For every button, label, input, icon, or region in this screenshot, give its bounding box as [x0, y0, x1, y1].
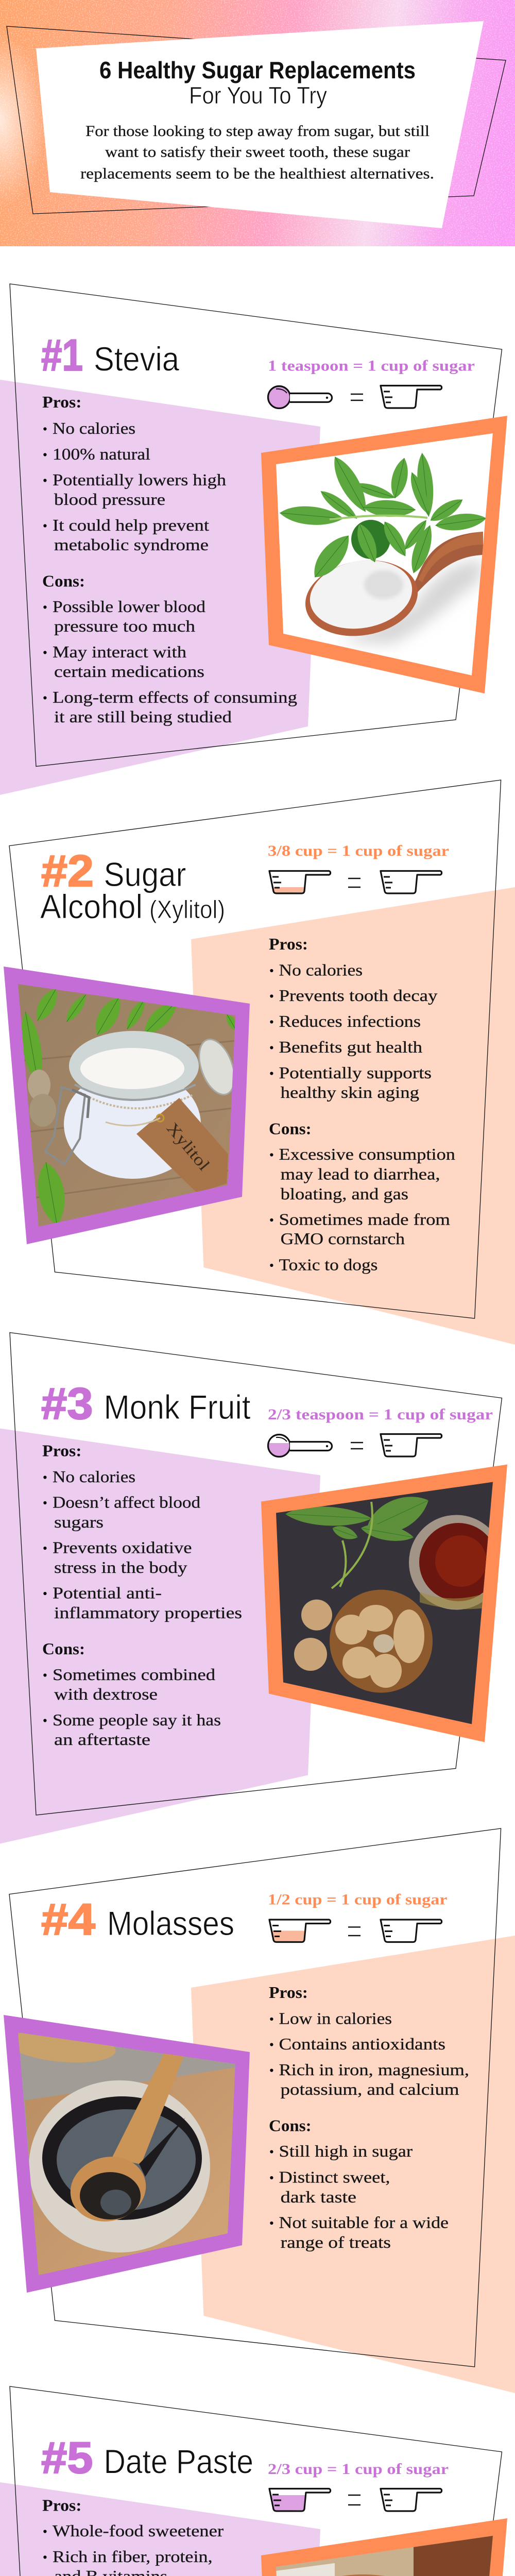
header outline frame — [7, 26, 506, 214]
cons list: Cons: — [269, 1119, 312, 1138]
pros list — [42, 1442, 242, 1622]
cons list: may lead to diarrhea, — [281, 1164, 440, 1183]
section outline — [10, 284, 502, 767]
section 1: Stevia — [0, 284, 507, 795]
cons list: Cons: — [42, 572, 85, 590]
title: For You To Try — [189, 82, 327, 109]
cons list: Long-term effects of consuming — [53, 688, 297, 706]
cons list: Some people say it has — [53, 1710, 221, 1729]
heading — [41, 331, 179, 380]
pros list — [42, 2496, 233, 2576]
cons list: Sometimes made from — [279, 1210, 450, 1228]
icon: partly filled cup — [269, 871, 331, 893]
cons list: May interact with — [53, 642, 186, 661]
serving ratio: 1 teaspoon = 1 cup of sugar — [268, 358, 475, 374]
heading: Date Paste — [104, 2443, 253, 2481]
heading — [41, 1379, 250, 1429]
pros list: inflammatory properties — [54, 1603, 242, 1622]
heading: Sugar — [104, 855, 186, 893]
serving ratio: 2/3 teaspoon = 1 cup of sugar — [268, 1406, 493, 1423]
pros list: Prevents tooth decay — [279, 986, 438, 1005]
peach backdrop — [191, 887, 515, 1345]
icon: equals — [348, 878, 360, 887]
serving ratio — [268, 358, 475, 408]
heading: Monk Fruit — [104, 1388, 250, 1426]
cons list: Possible lower blood — [53, 597, 205, 616]
icon: cup — [381, 1434, 442, 1456]
heading: #5 — [41, 2433, 93, 2483]
cons list: pressure too much — [54, 617, 195, 635]
heading: #3 — [41, 1379, 93, 1429]
photo: monk fruit and tea — [273, 1479, 504, 1726]
cons list: Cons: — [269, 2116, 312, 2135]
title: 6 Healthy Sugar Replacements — [99, 57, 416, 83]
pros list: Low in calories — [279, 2009, 392, 2028]
icon: equals — [348, 1927, 360, 1936]
cons list: Excessive consumption — [279, 1145, 455, 1163]
pros list: Rich in iron, magnesium, — [279, 2060, 469, 2079]
cons list: Toxic to dogs — [279, 1255, 377, 1274]
icon: cup — [381, 2488, 442, 2511]
photo: molasses bowl with wooden spoon — [7, 2026, 237, 2277]
section 5: Date Paste — [0, 2386, 507, 2576]
pros list: Doesn’t affect blood — [53, 1493, 200, 1512]
intro text — [80, 123, 434, 182]
photo frame — [261, 2518, 507, 2576]
purple backdrop — [0, 1428, 320, 1843]
cons list: it are still being studied — [54, 707, 232, 726]
icon: half filled cup — [269, 1920, 331, 1942]
heading: #2 — [41, 846, 94, 896]
pros list: Pros: — [42, 2496, 81, 2514]
heading — [41, 2433, 253, 2483]
pros list: 100% natural — [53, 445, 150, 463]
icon: cup — [381, 1920, 442, 1942]
tag label: Xylitol — [163, 1118, 214, 1174]
cons list: dark taste — [281, 2188, 356, 2206]
pros list: Prevents oxidative — [53, 1538, 192, 1557]
pros list: Potential anti- — [53, 1584, 162, 1602]
icon: teaspoon — [268, 386, 332, 408]
pros list: No calories — [279, 960, 363, 979]
pros list: Rich in fiber, protein, — [53, 2547, 213, 2566]
pros list: Reduces infections — [279, 1012, 421, 1030]
heading: #1 — [41, 331, 83, 380]
pros list: Pros: — [269, 1983, 308, 2002]
cons list — [269, 1119, 455, 1274]
cons list: with dextrose — [54, 1685, 158, 1703]
photo frame — [4, 967, 250, 1244]
intro text: want to satisfy their sweet tooth, these sugar — [105, 143, 410, 161]
pros list: Whole-food sweetener — [53, 2521, 224, 2540]
photo: date paste jar — [276, 2536, 493, 2576]
cons list: an aftertaste — [54, 1730, 150, 1749]
heading: Alcohol — [40, 887, 143, 925]
serving ratio: 1/2 cup = 1 cup of sugar — [268, 1891, 448, 1908]
section 3: Monk Fruit — [0, 1332, 507, 1843]
pros list: Pros: — [42, 1442, 81, 1460]
cons list: GMO cornstarch — [281, 1229, 405, 1248]
section 4: Molasses — [4, 1828, 515, 2393]
heading — [40, 846, 225, 925]
cons list: Distinct sweet, — [279, 2168, 390, 2187]
heading — [41, 1895, 234, 1944]
photo frame — [261, 1464, 507, 1742]
pros list: sugars — [54, 1513, 104, 1531]
pros list: Benefits gut health — [279, 1038, 422, 1056]
pros list: Pros: — [42, 393, 81, 411]
pros list: Pros: — [269, 935, 308, 953]
cons list: Sometimes combined — [53, 1665, 215, 1684]
photo frame — [261, 416, 507, 693]
pros list: potassium, and calcium — [281, 2080, 459, 2098]
title — [99, 57, 416, 109]
pros list: Potentially lowers high — [53, 470, 226, 489]
pros list: blood pressure — [54, 490, 165, 509]
serving ratio — [268, 2461, 449, 2511]
photo: xylitol jar with tag — [15, 979, 241, 1231]
section outline — [9, 780, 501, 1318]
section outline — [10, 1332, 502, 1815]
pros list: It could help prevent — [53, 516, 209, 534]
pros list: metabolic syndrome — [54, 535, 209, 554]
pros list — [42, 393, 226, 554]
header banner — [0, 0, 515, 246]
header white panel — [36, 21, 484, 228]
heading: #4 — [41, 1895, 95, 1944]
purple backdrop — [0, 380, 320, 795]
section outline — [10, 2386, 502, 2576]
photo frame — [4, 2015, 250, 2293]
cons list: Still high in sugar — [279, 2142, 413, 2160]
cons list: Not suitable for a wide — [279, 2213, 449, 2232]
heading: (Xylitol) — [149, 896, 225, 924]
cons list: bloating, and gas — [281, 1184, 408, 1203]
cons list — [269, 2116, 449, 2251]
serving ratio: 2/3 cup = 1 cup of sugar — [268, 2461, 449, 2478]
photo: stevia leaves and powder in wooden spoon — [276, 433, 493, 675]
cons list — [42, 572, 297, 726]
icon: equals — [351, 394, 363, 400]
pros list: Potentially supports — [279, 1063, 432, 1082]
heading: Stevia — [94, 340, 179, 378]
serving ratio: 3/8 cup = 1 cup of sugar — [268, 842, 449, 859]
pros list: healthy skin aging — [281, 1083, 419, 1101]
icon: partly filled teaspoon — [268, 1434, 332, 1457]
serving ratio — [268, 1891, 448, 1942]
pros list: No calories — [53, 419, 135, 437]
icon: cup — [381, 385, 442, 408]
pros list — [269, 935, 438, 1101]
cons list: range of treats — [281, 2233, 391, 2251]
cons list — [42, 1639, 221, 1749]
icon: equals — [348, 2495, 360, 2505]
pros list: Contains antioxidants — [279, 2035, 445, 2053]
serving ratio — [268, 1406, 493, 1457]
icon: cup — [381, 871, 442, 893]
purple backdrop — [0, 2482, 320, 2576]
intro text: replacements seem to be the healthiest alternatives. — [80, 165, 434, 182]
pros list — [269, 1983, 469, 2098]
icon: two-thirds filled cup — [269, 2488, 331, 2511]
cons list: certain medications — [54, 662, 204, 681]
pros list: No calories — [53, 1467, 135, 1486]
heading: Molasses — [107, 1904, 234, 1942]
section outline — [9, 1828, 501, 2367]
icon: equals — [351, 1443, 363, 1449]
intro text: For those looking to step away from sugar, but still — [85, 123, 430, 140]
pros list: stress in the body — [54, 1558, 187, 1577]
peach backdrop — [191, 1936, 515, 2393]
serving ratio — [268, 842, 449, 893]
cons list: Cons: — [42, 1639, 85, 1658]
section 2: Sugar Alcohol — [4, 780, 515, 1345]
